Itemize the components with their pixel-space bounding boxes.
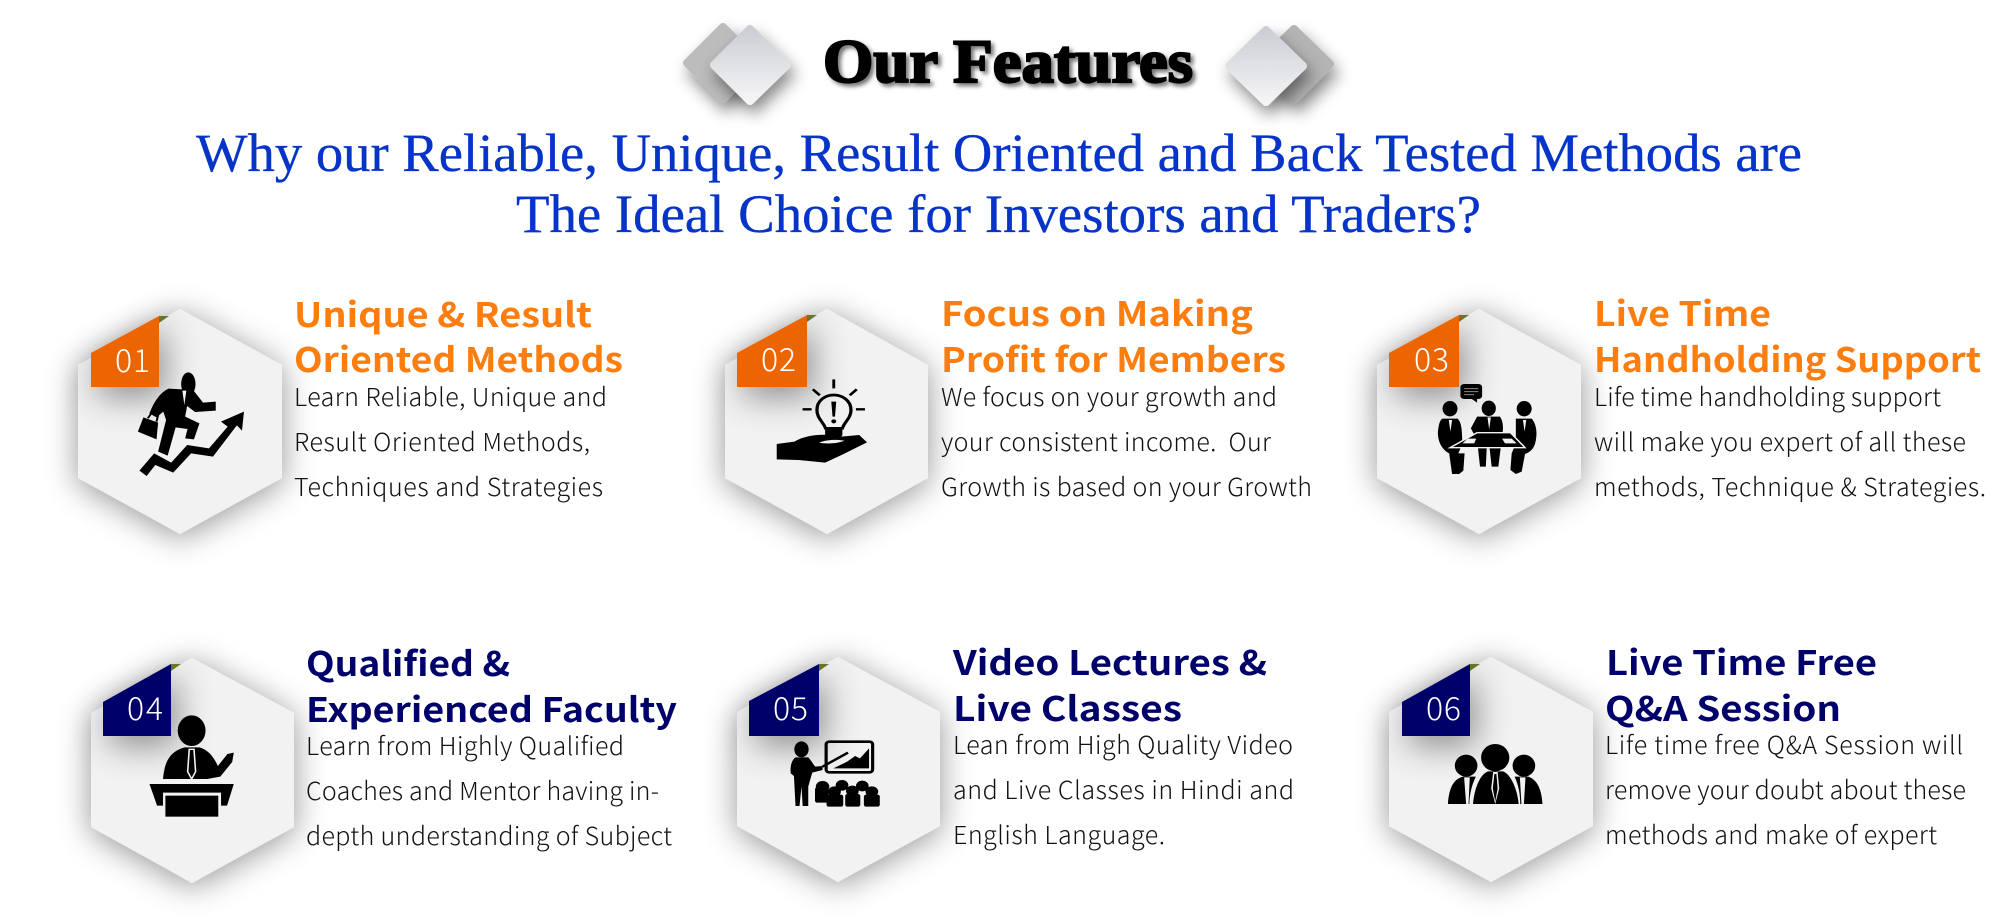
description: We focus on your growth and <box>941 378 1277 414</box>
panel: feature 04 <box>91 637 678 883</box>
heading <box>941 287 1286 382</box>
description: depth understanding of Subject <box>306 817 672 853</box>
icon: three people group <box>1448 744 1542 804</box>
number tab 06: 06 <box>1426 684 1461 730</box>
number tab 04: 04 <box>127 684 163 730</box>
panel: feature 03 <box>1377 287 1986 534</box>
subtitle heading: Why our Reliable, Unique, Result Oriented and Back Tested Methods are <box>196 123 1802 183</box>
icon: presenter with chart and audience <box>791 741 880 807</box>
description: Result Oriented Methods, <box>294 423 590 459</box>
title: Our Features <box>823 29 1193 96</box>
number tab 06 <box>1402 664 1480 736</box>
description: Life time free Q&A Session will <box>1605 726 1963 762</box>
number tab 03: 03 <box>1414 335 1449 381</box>
heading: Oriented Methods <box>294 333 623 382</box>
number tab 05 <box>749 664 829 736</box>
description: your consistent income. Our <box>941 423 1272 459</box>
subtitle heading: The Ideal Choice for Investors and Traders? <box>516 184 1481 244</box>
description: methods, Technique & Strategies. <box>1594 468 1986 504</box>
description: Growth is based on your Growth <box>941 468 1312 504</box>
hexagon <box>1389 657 1593 882</box>
hexagon <box>78 309 282 534</box>
hexagon <box>1377 309 1581 534</box>
description: remove your doubt about these <box>1605 771 1966 807</box>
heading: Experienced Faculty <box>306 683 678 732</box>
description <box>306 727 672 853</box>
description: Coaches and Mentor having in- <box>306 772 659 808</box>
heading: Live Time <box>1594 287 1771 336</box>
description: methods and make of expert <box>1605 816 1937 852</box>
description: Learn from Highly Qualified <box>306 727 624 763</box>
description: English Language. <box>953 816 1165 852</box>
heading <box>952 636 1267 731</box>
description: Techniques and Strategies <box>294 468 603 504</box>
heading: Q&A Session <box>1605 682 1841 731</box>
description: will make you expert of all these <box>1594 423 1966 459</box>
description <box>953 726 1294 852</box>
description <box>941 378 1312 504</box>
description: Life time handholding support <box>1594 378 1941 414</box>
icon: speaker at podium <box>150 715 234 817</box>
subtitle heading <box>196 123 1802 244</box>
panel: feature 02 <box>725 287 1312 534</box>
heading: Profit for Members <box>941 333 1286 382</box>
description <box>1594 378 1986 504</box>
heading <box>1605 636 1877 731</box>
heading <box>1594 287 1981 382</box>
description: and Live Classes in Hindi and <box>953 771 1294 807</box>
hexagon <box>725 309 928 534</box>
icon: team meeting at table <box>1438 384 1536 474</box>
header: decorative diamonds and title <box>687 27 1330 102</box>
number tab 05: 05 <box>773 684 808 730</box>
number tab 02: 02 <box>761 335 796 381</box>
heading: Handholding Support <box>1594 333 1981 382</box>
icon: left diamonds <box>687 27 787 101</box>
panel: feature 01 <box>78 288 623 534</box>
icon: right diamonds <box>1229 29 1330 102</box>
number tab 04 <box>103 664 181 736</box>
number tab 03 <box>1389 315 1469 387</box>
description <box>294 378 607 504</box>
heading: Unique & Result <box>294 288 592 337</box>
heading <box>294 288 623 382</box>
hexagon <box>91 658 294 883</box>
heading <box>306 637 678 732</box>
heading: Video Lectures & <box>952 636 1267 685</box>
number tab 02 <box>737 315 817 387</box>
description: Learn Reliable, Unique and <box>294 378 607 414</box>
description: Lean from High Quality Video <box>953 726 1293 762</box>
description <box>1605 726 1966 852</box>
panel: feature 05 <box>737 636 1294 882</box>
icon: businessman climbing arrow <box>138 372 244 476</box>
heading: Focus on Making <box>941 287 1253 336</box>
heading: Live Time Free <box>1606 636 1877 685</box>
heading: Live Classes <box>953 682 1182 731</box>
heading: Qualified & <box>306 637 510 686</box>
number tab 01: 01 <box>115 336 150 382</box>
hexagon <box>737 657 940 882</box>
number tab 01 <box>91 316 169 387</box>
icon: hand holding light bulb <box>777 379 867 463</box>
panel: feature 06 <box>1389 636 1966 882</box>
